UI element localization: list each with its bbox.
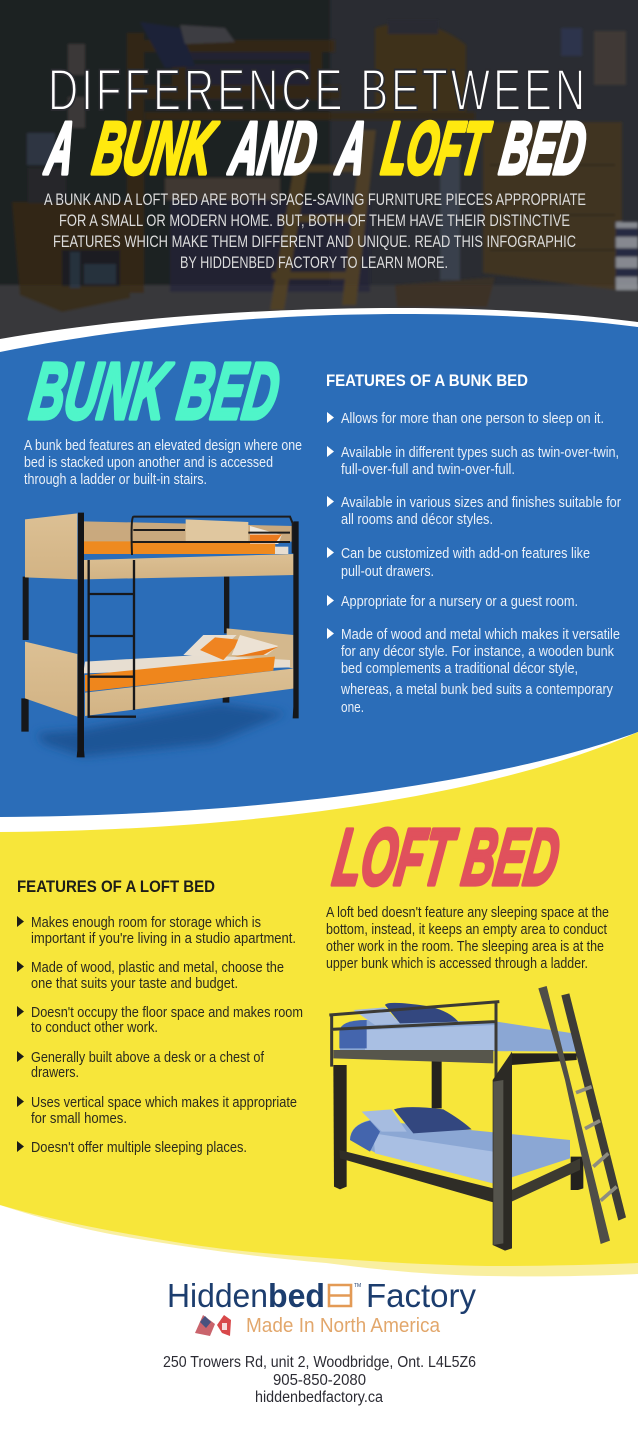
bullet list: Made of wood, plastic and metal, choose the: [31, 960, 284, 976]
bullet list: bed complements a traditional décor style,: [341, 661, 578, 677]
logo wordmark: bed: [268, 1277, 325, 1314]
bullet list: pull-out drawers.: [341, 564, 434, 580]
bunk bed description: bed is stacked upon another and is accessed: [24, 455, 273, 471]
main title line 2: [41, 107, 592, 189]
icon: logo box: [329, 1285, 351, 1306]
logo wordmark: Factory: [366, 1277, 476, 1314]
bullet list: drawers.: [31, 1065, 79, 1081]
panel: bunk bed: [0, 314, 638, 817]
bullet list: all rooms and décor styles.: [341, 512, 493, 528]
loft bed illustration: [329, 986, 626, 1251]
dark wall: [0, 0, 638, 345]
loft bed description: [326, 905, 609, 972]
made in north america tagline: Made In North America: [246, 1315, 441, 1337]
footer: company logo and contact: [163, 1277, 476, 1406]
bullet list: one.: [341, 700, 364, 716]
white curve above blue panel: [0, 308, 638, 360]
address: 250 Trowers Rd, unit 2, Woodbridge, Ont. L4L5Z6: [163, 1354, 476, 1371]
bedroom background: [0, 0, 638, 350]
loft bed description: upper bunk which is accessed through a ladder.: [326, 956, 588, 972]
features of a loft bed: [17, 877, 303, 1156]
bullet list: for small homes.: [31, 1111, 127, 1127]
main title line 2: AND: [224, 107, 323, 189]
logo wordmark: Hidden: [167, 1277, 268, 1314]
logo wordmark: TM: [354, 1283, 361, 1289]
bullet list: full-over-full and twin-over-full.: [341, 462, 515, 478]
bunk bed illustration: [21, 513, 299, 757]
main title line 2: A: [41, 107, 81, 189]
bullet list: Appropriate for a nursery or a guest room.: [341, 594, 578, 610]
icon: US and Canadian flags: [195, 1315, 231, 1336]
bullet list: one that suits your taste and budget.: [31, 976, 238, 992]
bullet list: Doesn't occupy the floor space and makes room: [31, 1005, 303, 1021]
heading: FEATURES OF A LOFT BED: [17, 877, 215, 896]
logo wordmark: [167, 1277, 476, 1314]
header panel with dark bedroom photo: [0, 0, 638, 350]
intro paragraph: BY HIDDENBED FACTORY TO LEARN MORE.: [180, 253, 448, 272]
yellow background: [0, 732, 638, 1266]
bunk bed heading: BUNK BED: [25, 347, 285, 436]
main title line 2: LOFT: [377, 107, 495, 189]
bullet list: Doesn't offer multiple sleeping places.: [31, 1140, 247, 1156]
phone: 905-850-2080: [273, 1372, 366, 1389]
panel: loft bed: [0, 732, 638, 1276]
bullet list: [327, 411, 621, 716]
main title line 1: DIFFERENCE BETWEEN: [48, 57, 585, 123]
bullet list: important if you're living in a studio apartment.: [31, 931, 296, 947]
blue background: [0, 314, 638, 817]
main title line 2: A: [331, 107, 373, 189]
bullet list: Makes enough room for storage which is: [31, 915, 261, 931]
website: hiddenbedfactory.ca: [255, 1389, 383, 1406]
lighter fade at yellow bottom edge: [0, 1200, 638, 1276]
bunk bed description: [24, 438, 302, 488]
bullet list: Uses vertical space which makes it appropriate: [31, 1095, 297, 1111]
bullet list: Generally built above a desk or a chest of: [31, 1050, 265, 1066]
bullet list: Can be customized with add-on features like: [341, 546, 590, 562]
features of a bunk bed: [326, 371, 621, 716]
main title line 2: BUNK: [88, 107, 222, 189]
bullet list: to conduct other work.: [31, 1020, 158, 1036]
heading: FEATURES OF A BUNK BED: [326, 371, 528, 390]
bullet list: [17, 915, 303, 1156]
bullet list: Allows for more than one person to sleep on it.: [341, 411, 604, 427]
bunk bed description: A bunk bed features an elevated design where one: [24, 438, 302, 454]
intro paragraph: [44, 190, 586, 272]
bunk bed description: through a ladder or built-in stairs.: [24, 472, 207, 488]
